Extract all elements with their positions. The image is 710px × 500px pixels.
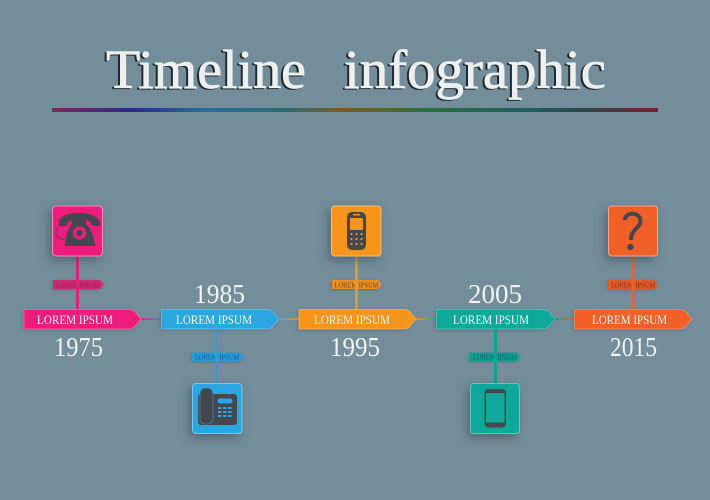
title	[104, 39, 606, 101]
icon: smartphone	[470, 384, 520, 434]
main arrow label	[162, 310, 279, 329]
title: Timeline	[106, 39, 306, 100]
milestone 2015	[574, 206, 692, 362]
stem	[76, 256, 79, 310]
title: infographic	[344, 39, 606, 100]
icon: rotary telephone	[52, 206, 102, 256]
main arrow label: LOREM IPSUM	[37, 313, 113, 327]
main arrow label	[574, 310, 692, 329]
main arrow label: LOREM IPSUM	[453, 313, 529, 327]
title: infographic	[342, 40, 604, 101]
icon: question mark	[608, 206, 658, 256]
stem	[215, 329, 218, 383]
main arrow label: LOREM IPSUM	[314, 313, 390, 327]
stem	[494, 329, 497, 383]
year 2005: 2005	[468, 279, 522, 309]
milestone 1995	[299, 206, 416, 362]
small tag: LOREM IPSUM	[56, 280, 99, 289]
main arrow label	[24, 310, 141, 329]
icon: mobile phone	[332, 206, 381, 256]
milestone 1975	[24, 206, 141, 362]
main arrow label	[436, 310, 555, 329]
connector: 1975 to 1985	[138, 318, 163, 320]
milestone 2005	[436, 279, 555, 434]
year 1985: 1985	[194, 279, 245, 309]
title rainbow rule	[52, 108, 658, 112]
icon: desk phone	[192, 384, 242, 434]
small tag: LOREM IPSUM	[611, 280, 655, 289]
main arrow label: LOREM IPSUM	[176, 313, 252, 327]
year 1975: 1975	[54, 332, 103, 362]
connector: 1995 to 2005	[414, 318, 438, 320]
stem	[355, 256, 358, 310]
year 1995: 1995	[330, 332, 380, 362]
small tag: LOREM IPSUM	[195, 352, 239, 361]
milestone 1985	[162, 279, 279, 434]
small tag: LOREM IPSUM	[473, 352, 517, 361]
stem	[632, 256, 634, 310]
main arrow label: LOREM IPSUM	[592, 313, 667, 327]
main arrow label	[299, 310, 416, 329]
connector: 1985 to 1995	[277, 318, 301, 320]
connector: 2005 to 2015	[553, 318, 577, 320]
small tag: LOREM IPSUM	[334, 280, 379, 289]
title: Timeline	[104, 40, 304, 101]
year 2015: 2015	[610, 332, 657, 362]
